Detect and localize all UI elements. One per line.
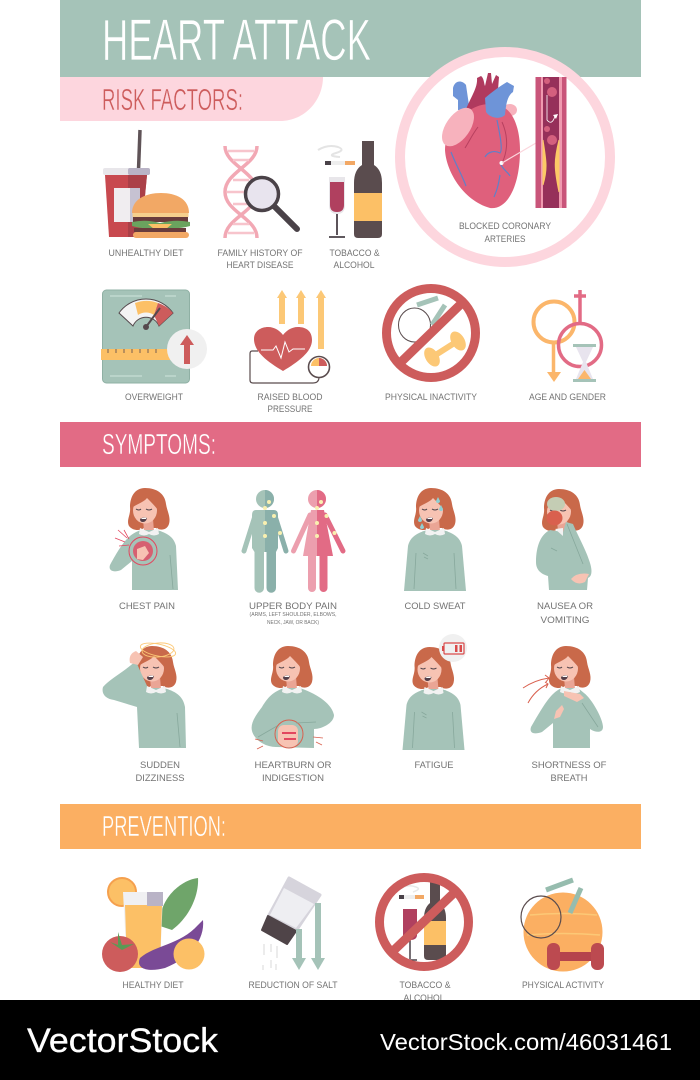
panel: blocked coronary arteries: [400, 52, 610, 262]
panel: blocked coronary arteries: BLOCKED CORONARY: [459, 221, 552, 232]
icon: healthy diet: [102, 878, 204, 972]
risk factor labels: RAISED BLOOD: [258, 392, 323, 403]
risk factors heading: [60, 77, 323, 121]
title band: [60, 0, 641, 77]
icon: tobacco and alcohol: [318, 141, 382, 238]
symptom labels row one: VOMITING: [540, 615, 590, 626]
risk factor labels: PHYSICAL INACTIVITY: [385, 392, 478, 403]
footer bar: [0, 1000, 700, 1080]
symptoms heading: [60, 422, 641, 467]
footer bar: VectorStock: [27, 1022, 219, 1060]
icon: cold sweat woman: [404, 488, 466, 591]
symptom labels row two: DIZZINESS: [136, 773, 184, 784]
symptoms heading: SYMPTOMS:: [102, 429, 216, 461]
icon: reduction of salt: [262, 878, 325, 970]
icon: age and gender: [534, 290, 602, 382]
icon: heart: [436, 73, 536, 208]
icon: no tobacco or alcohol: [380, 878, 468, 966]
icon: raised blood pressure: [250, 290, 330, 383]
risk factor labels: FAMILY HISTORY OF: [218, 248, 303, 259]
risk factor labels: PRESSURE: [268, 404, 312, 415]
prevention labels: ALCOHOL: [404, 993, 444, 1004]
symptom labels row two: SHORTNESS OF: [532, 760, 607, 771]
icon: chest pain woman: [110, 488, 178, 590]
footer bar: VectorStock.com/46031461: [380, 1029, 672, 1055]
icon: nausea woman: [536, 489, 592, 590]
risk factor labels: OVERWEIGHT: [125, 392, 183, 403]
risk factors heading: RISK FACTORS:: [102, 82, 243, 117]
risk factor labels: UNHEALTHY DIET: [108, 248, 184, 259]
icon: sudden dizziness woman: [103, 640, 186, 748]
icon: heartburn woman: [252, 646, 334, 749]
title: HEART ATTACK: [102, 8, 371, 73]
icon: physical inactivity: [386, 288, 476, 378]
prevention labels: PHYSICAL ACTIVITY: [522, 980, 605, 991]
risk factor labels: AGE AND GENDER: [529, 392, 606, 403]
risk factor labels: [108, 248, 606, 415]
symptom labels row two: SUDDEN: [140, 760, 180, 771]
icon: unhealthy diet: [103, 130, 190, 238]
symptom labels row one: COLD SWEAT: [404, 601, 466, 612]
symptom labels row two: FATIGUE: [414, 760, 454, 771]
icon: overweight scale: [101, 290, 207, 383]
icon: upper body pain figures: [244, 490, 343, 593]
icon: shortness of breath woman: [523, 646, 603, 748]
prevention heading: PREVENTION:: [102, 811, 226, 843]
risk factor labels: TOBACCO &: [330, 248, 380, 259]
symptom labels row two: HEARTBURN OR: [254, 760, 332, 771]
symptom labels row one: UPPER BODY PAIN: [249, 601, 337, 612]
icon: DNA and magnifier: [225, 146, 297, 238]
symptom labels row one: CHEST PAIN: [119, 601, 175, 612]
symptom labels row one: [119, 601, 593, 626]
icon: fatigue woman: [402, 634, 467, 750]
risk factor labels: HEART DISEASE: [226, 260, 294, 271]
prevention labels: [122, 980, 605, 1004]
icon: physical activity: [521, 880, 604, 972]
symptom labels row two: [136, 760, 607, 784]
panel: blocked coronary arteries: ARTERIES: [484, 234, 526, 245]
symptom labels row two: INDIGESTION: [262, 773, 324, 784]
prevention labels: REDUCTION OF SALT: [248, 980, 338, 991]
symptom labels row two: BREATH: [550, 773, 588, 784]
symptom labels row one: (ARMS, LEFT SHOULDER, ELBOWS,: [250, 612, 337, 618]
prevention heading: [60, 804, 641, 849]
symptom labels row one: NECK, JAW, OR BACK): [267, 620, 319, 626]
prevention labels: TOBACCO &: [400, 980, 451, 991]
symptom labels row one: NAUSEA OR: [537, 601, 593, 612]
prevention labels: HEALTHY DIET: [122, 980, 184, 991]
risk factor labels: ALCOHOL: [334, 260, 374, 271]
icon: artery: [536, 77, 566, 208]
